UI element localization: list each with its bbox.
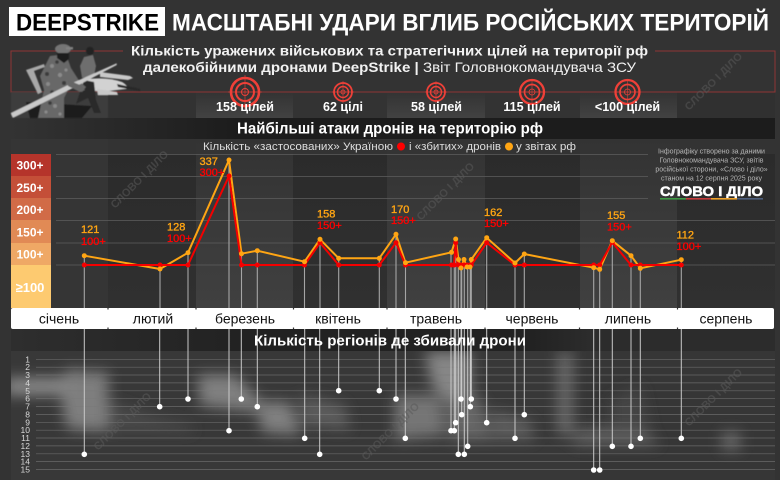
chart value labels	[81, 156, 701, 253]
month bar	[11, 308, 774, 329]
chart value labels: 128	[167, 222, 185, 234]
region count axis: 4	[25, 378, 30, 388]
chart value labels: 337	[200, 156, 218, 168]
source note: станом на 12 серпня 2025 року	[661, 176, 763, 182]
source note: російської сторони, «Слово і діло»	[655, 166, 768, 174]
watermarks: СЛОВО І ДІЛО	[92, 390, 154, 453]
subtitle: далекобійними дронами DeepStrike | Звіт Головнокомандувача ЗСУ	[143, 59, 636, 75]
chart legend: у звітах рф	[516, 141, 576, 153]
region count axis: 13	[21, 449, 30, 459]
region lollipops	[82, 329, 684, 473]
target count: under 100	[595, 79, 660, 114]
chart value labels: 100+	[676, 241, 701, 253]
watermarks: СЛОВО І ДІЛО	[683, 366, 745, 429]
target count: under 100: <100 цілей	[595, 100, 660, 114]
logo: Slovo i Dilo: СЛОВО І ДІЛО	[660, 183, 763, 199]
chart value labels: 155	[607, 210, 625, 222]
chart value labels: 121	[81, 224, 99, 236]
region grid rows	[36, 359, 775, 470]
source note: Інфографіку створено за даними	[658, 148, 765, 156]
subtitle	[131, 42, 648, 75]
month bar: лютий	[133, 310, 173, 326]
source note: Головнокомандувача ЗСУ, звітів	[660, 156, 764, 164]
chart value labels: 162	[484, 207, 502, 219]
target count: 158	[216, 75, 274, 114]
target count: 62	[323, 81, 363, 114]
chart value labels: 100+	[167, 233, 192, 245]
lower map backdrop	[11, 351, 748, 458]
region count axis	[21, 354, 30, 474]
value axis scale: 150+	[16, 226, 44, 240]
region count axis: 7	[25, 402, 30, 412]
chart value labels: 112	[676, 230, 694, 242]
target count: 58	[411, 81, 462, 114]
target count: 115: 115 цілей	[503, 100, 561, 114]
heading band: biggest attacks: Найбільші атаки дронів на територію рф	[237, 120, 543, 138]
watermarks: СЛОВО І ДІЛО	[360, 400, 422, 463]
month bar: березень	[215, 310, 275, 326]
chart value labels: 300+	[200, 167, 224, 179]
chart value labels: 170	[391, 204, 409, 216]
title badge: DEEPSTRIKE: DEEPSTRIKE	[16, 10, 159, 36]
chart legend	[203, 141, 576, 153]
photo: soldiers launching a drone	[11, 44, 140, 118]
month bar: липень	[605, 310, 651, 326]
region count axis: 9	[25, 417, 30, 427]
target count: 115	[503, 79, 561, 114]
month bar: червень	[506, 310, 558, 326]
chart value labels: 100+	[81, 236, 106, 248]
value axis scale	[11, 154, 51, 308]
chart drop lines	[84, 160, 681, 308]
chart background columns	[11, 139, 775, 308]
value axis scale: 200+	[16, 203, 44, 217]
chart value labels: 150+	[607, 222, 632, 234]
region count axis: 1	[25, 354, 30, 364]
month bar: січень	[39, 310, 79, 326]
region count axis: 3	[25, 370, 30, 380]
heading band: regions	[11, 329, 775, 351]
value axis scale: 300+	[16, 158, 44, 172]
region count axis: 12	[21, 441, 30, 451]
value axis scale: 100+	[16, 248, 44, 262]
month bar: травень	[410, 310, 462, 326]
region count axis: 11	[21, 433, 30, 443]
region count axis: 5	[25, 386, 30, 396]
region count axis: 15	[21, 464, 30, 474]
source note	[655, 148, 768, 182]
watermarks	[92, 50, 745, 463]
chart value labels: 158	[317, 208, 335, 220]
red frame	[11, 51, 775, 92]
month bar: серпень	[700, 310, 752, 326]
subtitle: Кількість уражених військових та стратегічних цілей на території рф	[131, 42, 648, 58]
watermarks: СЛОВО І ДІЛО	[415, 160, 477, 223]
target count: 58: 58 цілей	[411, 100, 462, 114]
region count axis: 10	[21, 425, 30, 435]
target count: 158: 158 цілей	[216, 100, 274, 114]
line chart: reported by russia (orange) and claimed shot down (red)	[82, 158, 684, 272]
heading band: biggest attacks	[11, 118, 775, 139]
watermarks: СЛОВО І ДІЛО	[683, 50, 745, 113]
top column stripes	[108, 92, 775, 118]
region count axis: 14	[21, 457, 30, 467]
region count axis: 2	[25, 362, 30, 372]
chart legend: і «збитих» дронів	[409, 141, 501, 153]
region count axis: 6	[25, 394, 30, 404]
watermarks: СЛОВО І ДІЛО	[109, 148, 171, 211]
value axis scale: 250+	[16, 181, 44, 195]
chart value labels: 150+	[484, 218, 509, 230]
chart legend: Кількість «застосованих» Україною	[203, 141, 393, 153]
value axis scale: ≥100	[16, 280, 44, 295]
month bar: квітень	[315, 310, 361, 326]
regions heading: Кількість регіонів де збивали дрони	[254, 333, 526, 350]
region count axis: 8	[25, 409, 30, 419]
chart value labels: 150+	[317, 220, 342, 232]
target count: 62: 62 цілі	[323, 100, 363, 114]
chart grid	[56, 154, 775, 265]
chart value labels: 150+	[391, 215, 416, 227]
